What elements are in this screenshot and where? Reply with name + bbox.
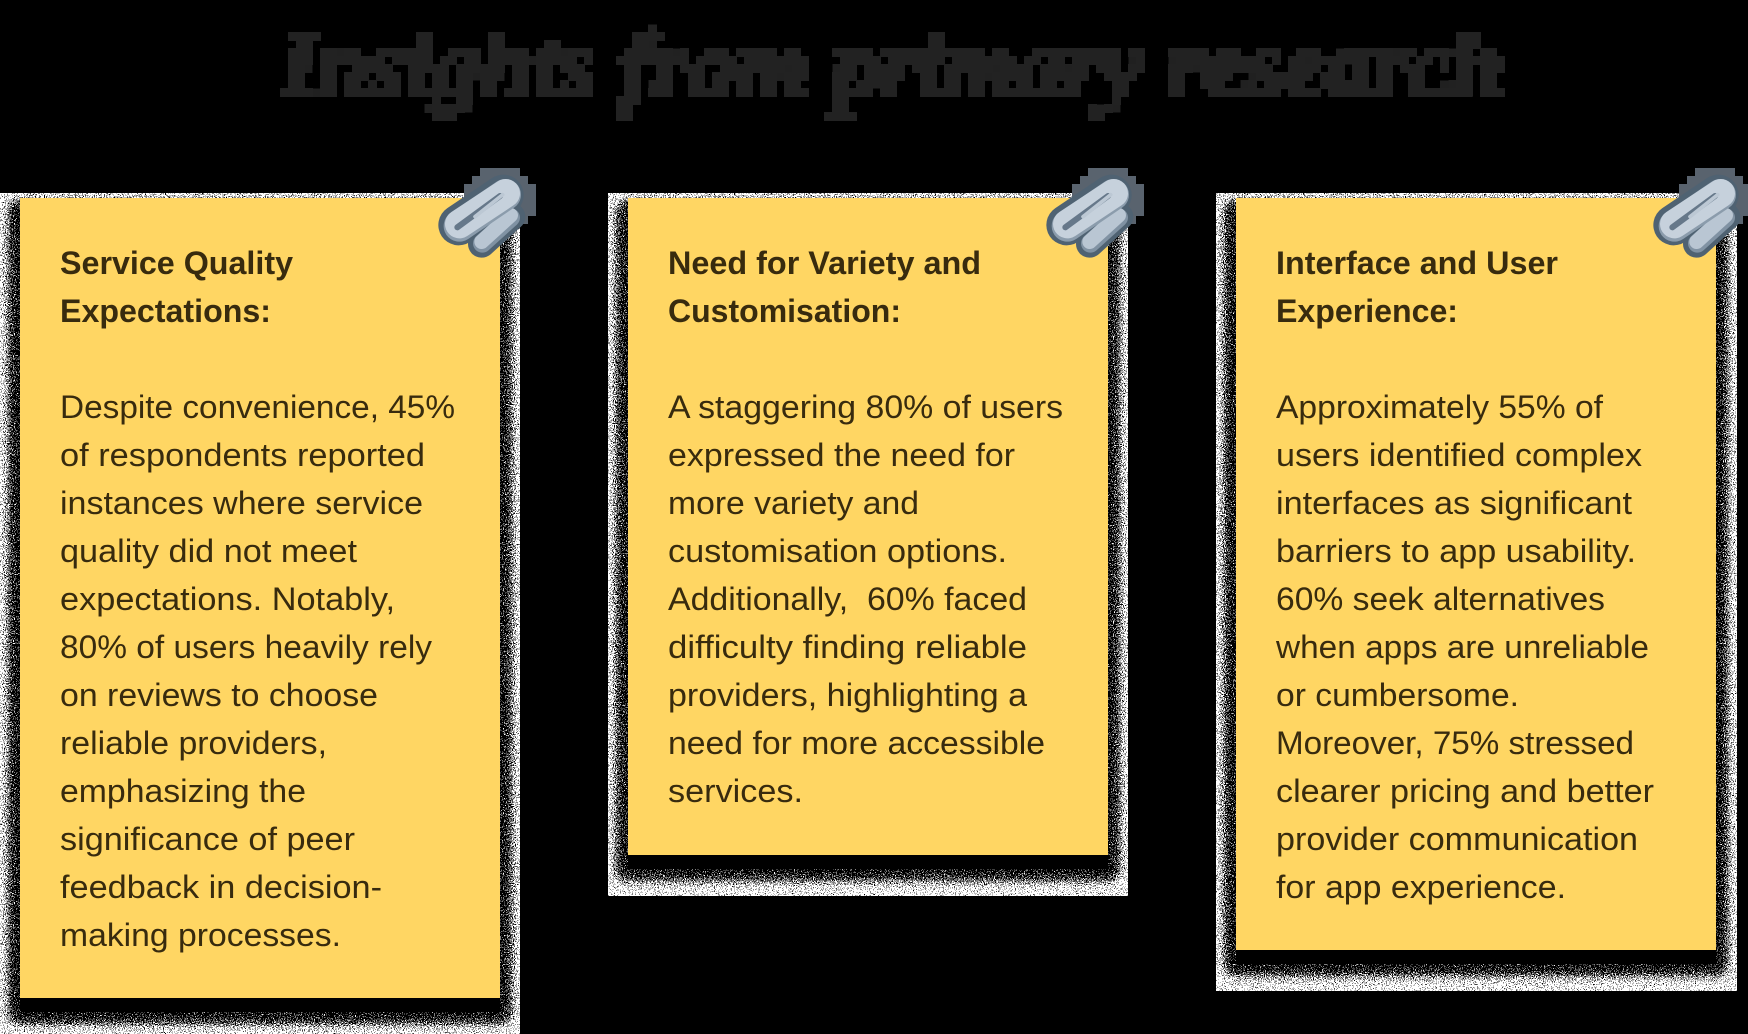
text block: variety and customisation: customisation options. [668,533,1007,569]
text block: variety and customisation: difficulty finding reliable [668,629,1027,665]
text block: service quality [60,389,455,953]
text block: service quality: 80% of users heavily rely [60,629,432,665]
text block: service quality: expectations. Notably, [60,581,395,617]
heading: interface and user experience: Experience: [1276,293,1458,329]
text block: service quality: making processes. [60,917,341,953]
text block: interface and user experience: provider communication [1276,821,1638,857]
icon: paperclip [1672,168,1748,244]
text block: service quality: quality did not meet [60,533,357,569]
text block: interface and user experience [1275,389,1654,905]
text block: service quality: Despite convenience, 45% [60,389,455,425]
heading: variety and customisation: Need for Variety and [668,245,981,281]
text block: variety and customisation [668,389,1063,809]
panel: interface and user experience [1216,168,1748,991]
text block: interface and user experience: 60% seek alternatives [1276,581,1605,617]
heading: service quality: Expectations: [60,293,271,329]
heading: variety and customisation: Customisation: [668,293,901,329]
heading: service quality [60,245,293,329]
text block: interface and user experience: interfaces as significant [1276,485,1632,521]
text block: interface and user experience: users identified complex [1276,437,1642,473]
text block: interface and user experience: Moreover, 75% stressed [1276,725,1634,761]
text block: interface and user experience: when apps are unreliable [1275,629,1649,665]
text block: interface and user experience: Approximately 55% of [1276,389,1603,425]
heading: variety and customisation [668,245,981,329]
text block: service quality: reliable providers, [60,725,327,761]
heading: interface and user experience [1276,245,1558,329]
icon: paperclip [457,168,536,244]
heading: service quality: Service Quality [60,245,293,281]
text block: variety and customisation: providers, highlighting a [668,677,1027,713]
text block: variety and customisation: expressed the need for [668,437,1015,473]
text block: interface and user experience: clearer pricing and better [1276,773,1654,809]
text block: interface and user experience: barriers to app usability. [1276,533,1636,569]
text block: service quality: significance of peer [60,821,355,857]
text block: service quality: of respondents reported [60,437,425,473]
text block: variety and customisation: Additionally, 60% faced [668,581,1027,617]
text block: interface and user experience: for app experience. [1276,869,1566,905]
text block: variety and customisation: need for more accessible [668,725,1045,761]
title: Insights from primary research [279,14,1504,116]
text block: variety and customisation: A staggering 80% of users [668,389,1063,425]
text block: service quality: on reviews to choose [60,677,378,713]
text block: variety and customisation: more variety and [668,485,919,521]
text block: service quality: instances where service [60,485,423,521]
panel: service quality expectations [0,168,536,1034]
text block: service quality: feedback in decision- [60,869,382,905]
heading: interface and user experience: Interface and User [1276,245,1558,281]
text block: interface and user experience: or cumbersome. [1276,677,1519,713]
text block: variety and customisation: services. [668,773,803,809]
text block: service quality: emphasizing the [60,773,306,809]
panel: variety and customisation [608,168,1144,896]
icon: paperclip [1065,168,1144,244]
